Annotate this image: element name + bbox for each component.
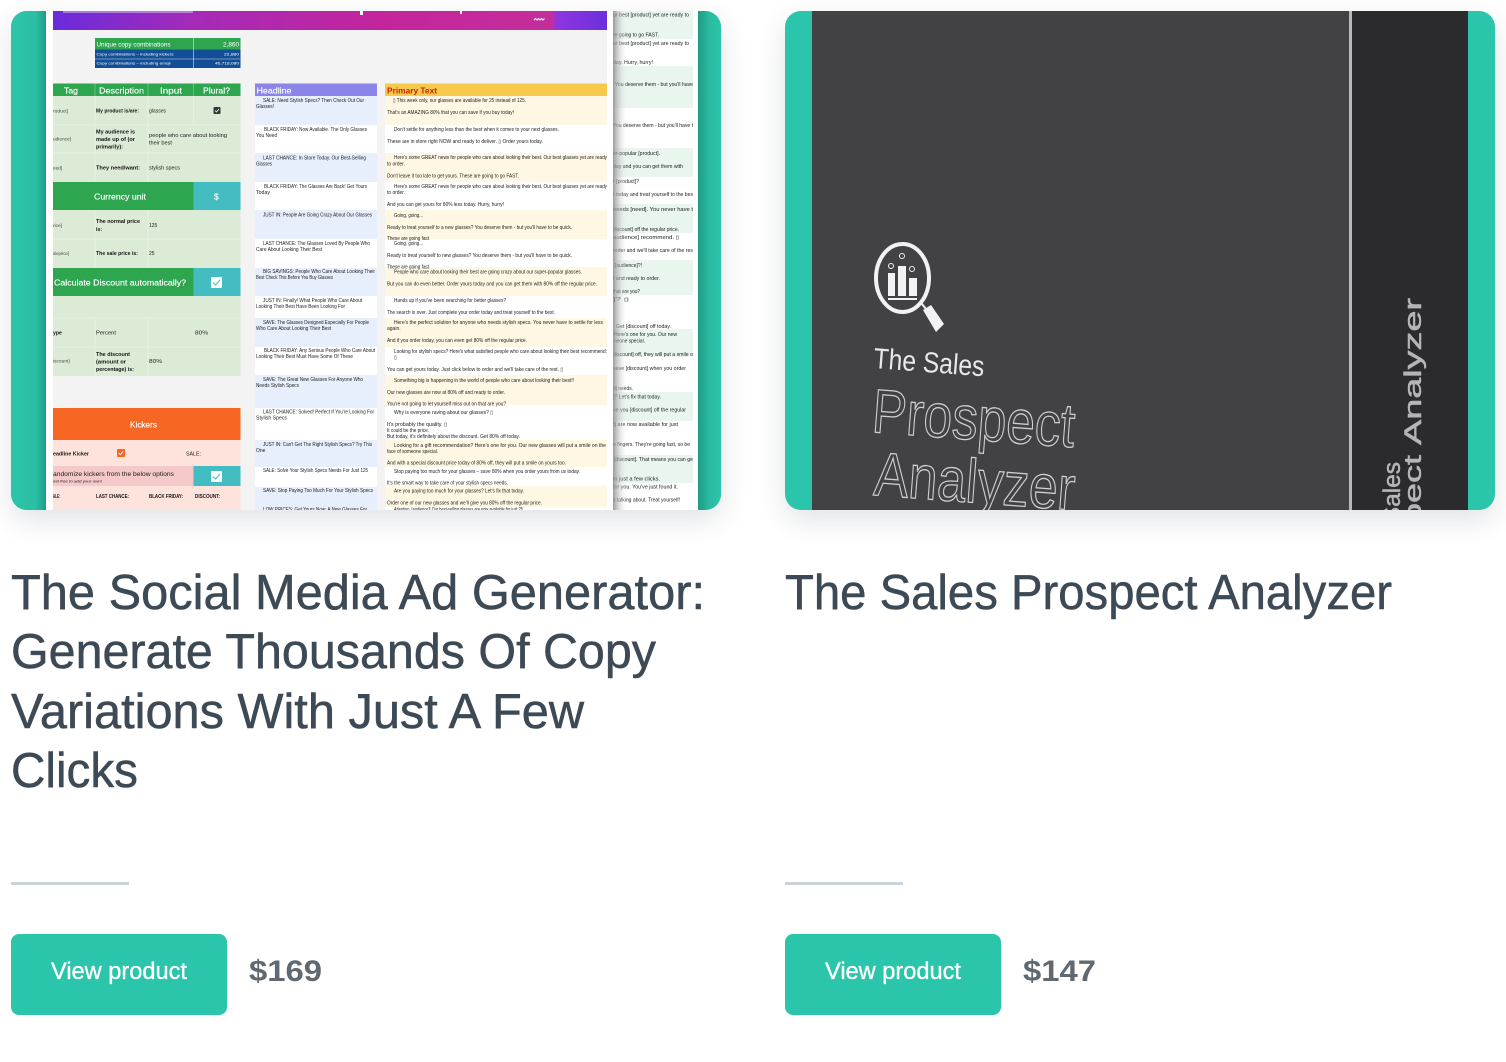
button: right view product: View product [825,958,961,985]
spreadsheet page [46,11,698,510]
input table: stylish specs [149,166,181,172]
input table: Plural? [203,86,230,96]
copy combinations table: 22,880 [224,52,240,56]
overlapping right page: e fingers. They're going fast, so be [613,442,690,448]
button: right view product [785,934,1001,1015]
overlapping right page: discount] off, they will put a smile o [613,352,693,358]
primary text column: That's an AMAZING 80% that you can save if you buy today! [387,110,514,116]
headline column: Looking Their Best Have Been Looking For [256,304,345,310]
overlapping right page: d] needs. [613,386,633,392]
copy combinations table: Unique copy combinations [96,42,170,48]
title: left product: Clicks [11,744,138,798]
headline column: LAST CHANCE: Solved! Perfect If You're Looking For [263,410,374,416]
headline column: BIG SAVINGS: People Who Care About Looking Their [263,269,375,275]
primary text column: Ready to treat yourself to new glasses? You deserve them - but you'll have to be quick. [387,253,572,259]
primary text column: Something big is happening in the world of people who care about looking their best!! [394,378,574,384]
input table: Input [160,86,183,96]
headline column: Today [256,190,271,196]
kickers table: ALE: [53,494,60,500]
kickers table: SALE: [186,452,201,458]
overlapping right page: Here's one for you. Our new [614,332,677,338]
overlapping right page: needs [need]. You never have t [613,207,694,213]
input table: udience] [53,136,71,142]
primary text column: Looking for a gift recommendation? Here's one for you. Our new glasses will put a smile on the [394,443,606,449]
primary text column: Going, going... [394,241,423,247]
input table: Calculate Discount automatically? [54,278,186,288]
primary text column: Primary Text [387,86,437,96]
primary text column: It could be the price. [387,428,429,434]
primary text column: These are in store right NOW and ready to deliver. ▯ Order yours today. [387,139,543,145]
input table: Currency unit [94,192,147,202]
input table: Percent [96,330,117,336]
primary text column: Stop paying too much for your glasses – save 80% when you order yours from us today. [394,469,580,475]
overlapping right page: neone special. [614,338,645,344]
input table [53,84,240,376]
overlapping right page: You deserve them - but you'll have t [613,123,694,129]
headline column: SAVE: The Glasses Designed Especially For People [263,320,369,326]
headline column: BLACK FRIDAY: Any Serious People Who Care About [264,348,376,354]
input table: 125 [149,223,158,229]
headline column: Needs Stylish Specs [256,383,299,389]
primary text column: The search is over. Just complete your order today and treat yourself to the best. [387,310,555,316]
overlapping right page: r [product]? [613,179,639,185]
kickers table [53,408,240,510]
input table: ype [53,330,62,336]
overlapping right page: er-popular [product]. [613,151,660,157]
primary text column: to order. [387,162,405,168]
primary text column [385,84,607,513]
price: right: $147 [1023,955,1096,988]
primary text column: Are you paying too much for your glasses? Let's fix that today. [394,488,524,494]
primary text column: It's probably the quality. ▯ [387,422,447,428]
headline column: SAVE: Stop Paying Too Much For Your Stylish Specs [263,488,373,494]
overlapping right page: re going to go FAST. [613,32,659,38]
primary text column: Ready to treat yourself to a new glasses? You deserve them - but you'll have to be quick. [387,225,572,231]
overlapping right page: f and ready to order. [613,276,660,282]
kickers table: andomize kickers from the below options [53,471,175,478]
primary text column: People who care about looking their best are going crazy about our super-popular glasses. [394,270,582,276]
overlapping right page: [discount]. That means you can ge [614,457,693,463]
kickers table: Kickers [130,420,157,430]
headline column [255,84,377,513]
button: left view product [11,934,227,1015]
overlapping right page: s talking about. Treat yourself! [613,498,680,504]
input table: (amount or [96,360,126,366]
headline column: Glasses [256,162,272,168]
primary text column: Looking for stylish specs? Here's what satisfied people who care about looking their best recommend: [394,349,607,355]
primary text column: And with a special discount price today of 80% off, they will put a smile on yours too. [387,460,566,466]
input table: percentage) is: [96,367,134,373]
input table: 80% [149,359,163,365]
input table: made up of (or [96,137,135,143]
kickers table: DISCOUNT: [195,494,220,500]
kickers table: BLACK FRIDAY: [149,494,183,500]
panel: social media ad generator image [11,11,721,510]
overlapping right page: order and we'll take care of the res [613,248,694,254]
copy combinations table: 2,860 [223,42,240,48]
spine title [1379,298,1427,597]
primary text column: You're not going to let yourself miss out on that are you? [387,402,506,408]
input table: is: [96,227,102,233]
input table: They need/want: [96,166,140,172]
input table: glasses [149,108,167,114]
primary text column: Order one of our new glasses and we'll give you 80% off the regular price. [387,500,542,506]
primary text column: Our new glasses are now at 80% off and ready to order. [387,390,505,396]
primary text column: And you can get yours for 80% less today. Hurry, hurry! [387,202,504,208]
headline column: Who Care About Looking Their Best [256,326,332,332]
title: left product: The Social Media Ad Generator: [11,566,705,620]
cover title: Prospect [870,377,1078,461]
headline column: SAVE: The Great New Glasses For Anyone Who [263,377,363,383]
input table: iscount) [53,358,70,364]
input table: sleprice] [53,251,69,256]
input table: My product is/are: [96,108,139,114]
title: right product: The Sales Prospect Analyzer [785,566,1392,620]
book cover [812,11,1468,510]
primary text column: It's the smart way to take care of your stylish specs needs. [387,480,508,486]
overlapping right page: ur best [product] yet are ready to [613,41,689,47]
title: left product: Generate Thousands Of Copy [11,625,656,679]
headline column: Best Check This Before You Buy Glasses [256,275,333,281]
headline column: Care About Looking Their Best [256,247,323,253]
teal side bands [11,11,721,510]
overlapping right page: ve you [discount] off the regular [613,408,686,414]
headline column: LAST CHANCE: In Store Today. Our Best-Selling [263,156,366,162]
headline column: BLACK FRIDAY: The Glasses Are Back! Get Yours [264,184,367,190]
copy combinations table [95,38,240,68]
overlapping right page: day and you can get them with [613,164,683,170]
cover title [870,343,1078,524]
input table: 80% [195,330,209,336]
overlapping right page: You deserve them - but you'll have [615,82,693,88]
headline column: Glasses! [256,104,274,110]
headline column: Looking Their Best Must Have Some Of These [256,354,353,360]
button: left view product: View product [51,958,187,985]
headline column: JUST IN: Finally! What People Who Care About [263,298,363,304]
input table: their best [149,140,173,146]
title: left product [10,566,705,798]
copy combinations table: 46,718,080 [215,60,240,66]
spine title: Analyzer [1400,298,1427,445]
primary text column: Here's the perfect solution for anyone who needs stylish specs. You never have to settle for less [394,320,603,326]
overlapping right page: in just a few clicks. [613,476,660,482]
banner [53,11,607,30]
primary text column: Hands up if you've been searching for better glasses? [394,298,506,304]
headline column: JUST IN: People Are Going Crazy About Our Glasses [263,212,372,218]
headline column: Headline [256,86,292,96]
input table: Tag [64,86,78,96]
primary text column: These are going fast [387,236,430,242]
kickers table: eel free to add your own! [53,478,103,484]
input table: 25 [149,251,155,257]
overlapping right page: t] are now available for just [613,422,679,428]
input table: $ [214,192,219,202]
primary text column: These are going fast [387,264,430,270]
primary text column: Why is everyone raving about our glasses? ▯ [394,410,493,416]
input table: The normal price [96,219,140,225]
input table: primarily): [96,144,123,150]
primary text column: Here's some GREAT news for people who care about looking their best. Our best glasses yet are ready [394,155,607,161]
primary text column: Don't settle for anything less than the best when it comes to your next glasses. [394,127,559,133]
input table: The discount [96,352,130,358]
input table: roduct] [53,108,68,114]
price: left: $169 [249,955,322,988]
overlapping right page: ur best [product] yet are ready to [613,12,689,18]
kickers table: eadline Kicker [53,452,89,458]
input table: rice] [53,223,62,228]
headline column: SALE: Solve Your Stylish Specs Needs For Just 125 [263,468,368,474]
copy combinations table: Copy combinations – including emoji [96,60,171,66]
divider: right [785,882,903,885]
primary text column: to order. [387,190,405,196]
overlapping right page: r today and treat yourself to the bes [613,192,693,198]
overlapping right page: [audience]?! [615,263,642,269]
headline column: JUST IN: Can't Get The Right Stylish Specs? Try This [263,442,372,448]
headline column: You Need [256,133,277,139]
overlapping right page: audience] recommend. ▯ [613,235,679,241]
input table: Description [99,86,144,96]
divider: left [11,882,129,885]
primary text column: face of someone special. [387,449,438,455]
overlapping right page: that are you? [613,289,640,295]
headline column: BLACK FRIDAY: Now Available. The Only Glasses [264,127,367,133]
headline column: SALE: Need Stylish Specs? Then Check Out Our [263,98,364,104]
input table: The sale price is: [96,251,138,257]
headline column: Stylish Specs [256,416,288,422]
kickers table: LAST CHANCE: [96,494,129,500]
primary text column: But today, it's definitely about the discount. Get 80% off today. [387,434,520,440]
overlapping right page: . Get [discount] off today. [613,324,671,330]
cover title: The Sales [872,343,986,383]
primary text column: But you can do even better. Order yours today and you can get them with 80% off the regular price. [387,282,597,288]
primary text column: You can get yours today. Just click below to order and we'll take care of the rest. ▯ [387,367,563,373]
input table: eed] [53,166,62,170]
title: left product: Variations With Just A Few [11,685,585,739]
headline column: One [256,448,266,454]
overlapping right page: ]? Let's fix that today. [613,394,661,400]
overlapping right page: save [discount] when you order [613,366,686,372]
input table: My audience is [96,130,135,136]
headline column: LAST CHANCE: The Glasses Loved By People Who [263,241,370,247]
panel: sales prospect analyzer image [785,11,1495,510]
primary text column: Here's some GREAT news for people who care about looking their best. Our best glasses yet are ready [394,184,607,190]
primary text column: Don't leave it too late to get yours. These are going to go FAST. [387,174,519,180]
input table: people who care about looking [149,133,227,139]
overlapping right page: ]? ▯ [613,297,629,303]
overlapping right page: day. Hurry, hurry! [613,60,653,66]
primary text column: ▯ [394,355,397,361]
overlapping right page: for you. You've just found it. [613,484,678,490]
copy combinations table: Copy combinations – including kickers [96,52,174,56]
primary text column: Going, going... [394,213,423,219]
icon: magnifying glass with bar chart [876,244,944,332]
primary text column: again. [387,326,401,332]
overlapping right page [613,11,694,510]
primary text column: And if you order today, you can even get 80% off the regular price. [387,338,527,344]
primary text column: ▯ This week only, our glasses are available for 25 instead of 125. [393,98,526,104]
overlapping right page: discount] off the regular price. [613,227,679,233]
